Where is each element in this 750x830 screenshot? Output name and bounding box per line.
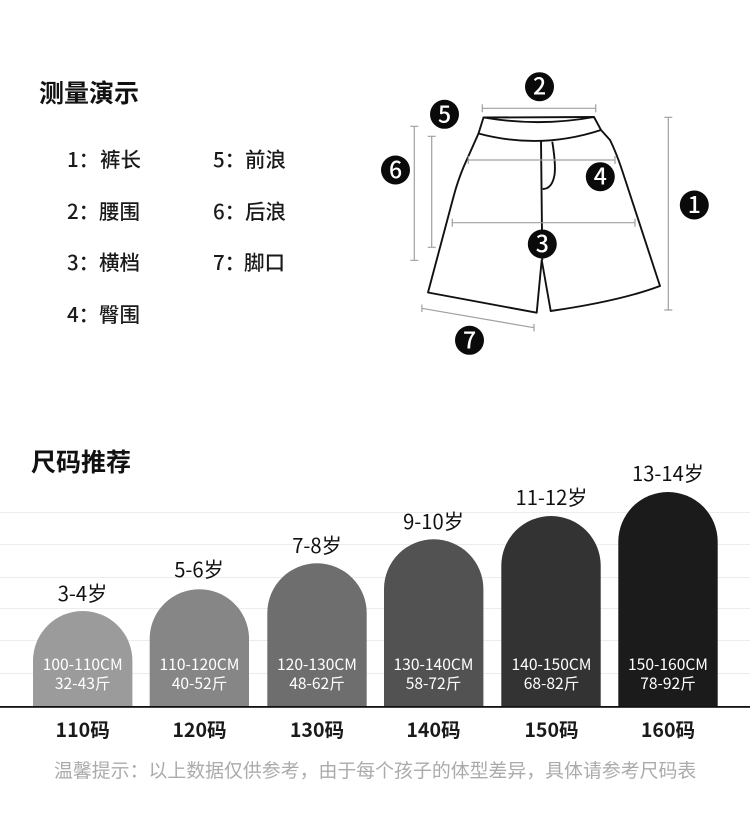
legend item 1: 1：: [67, 143, 99, 173]
legend: measurement list: [67, 143, 286, 328]
legend item 1: [67, 143, 141, 173]
bar chart: size by age: [33, 458, 718, 743]
dimension 6: back rise: [410, 126, 418, 260]
shorts diagram: [381, 68, 709, 355]
bar 120: 40-52斤: [172, 672, 227, 694]
legend item 3: 3：: [67, 246, 99, 276]
bar 140: 140码: [406, 714, 461, 743]
badge 3: [528, 225, 557, 259]
legend item 5: [213, 143, 286, 173]
dimension 7: leg opening: [422, 304, 534, 332]
heading: measurement demo: 测量演示: [39, 74, 139, 110]
badge 4: [586, 158, 615, 192]
badge 6: 6: [389, 151, 402, 185]
dimension 1: length: [664, 117, 672, 310]
shorts outline: [428, 117, 660, 313]
heading: size recommendation: 尺码推荐: [31, 443, 131, 479]
bar 140: 58-72斤: [406, 672, 461, 694]
legend item 7: [213, 246, 285, 276]
bar 120: 110-120CM: [160, 653, 239, 675]
bar 130: 48-62斤: [289, 672, 345, 694]
bar 150: 150码: [524, 714, 579, 743]
legend item 4: [67, 298, 140, 328]
dimension 3: crotch width: [452, 219, 635, 227]
bar 130: 130码: [290, 714, 344, 743]
bar 150: 68-82斤: [524, 672, 579, 694]
legend item 1: 裤长: [100, 143, 141, 173]
bar 150: 140-150CM: [512, 653, 591, 675]
bar 110: 32-43斤: [55, 672, 111, 694]
badge 1: [680, 186, 709, 220]
bar 110: [33, 578, 132, 743]
bar 130: [267, 530, 367, 743]
badge 4: 4: [594, 158, 607, 192]
badge 6: [381, 151, 410, 185]
badge 5: [430, 95, 459, 129]
legend item 2: 2：: [67, 195, 99, 225]
badge 5: 5: [438, 95, 451, 129]
legend item 2: 腰围: [99, 195, 140, 225]
bar 130: 120-130CM: [277, 653, 357, 675]
badge 1: 1: [688, 186, 701, 220]
bar 160: 13-14岁: [632, 458, 704, 487]
badge 2: [525, 68, 554, 102]
bar 120: [150, 554, 249, 743]
legend item 6: 后浪: [245, 195, 286, 225]
legend item 3: [67, 246, 140, 276]
badge 7: [455, 321, 484, 355]
legend item 5: 前浪: [245, 143, 286, 173]
badge 7: 7: [463, 321, 476, 355]
badge 2: 2: [533, 68, 546, 102]
bar 160: 160码: [641, 714, 695, 743]
bar 110: 100-110CM: [43, 653, 123, 675]
legend item 7: 7：: [213, 246, 245, 276]
bar 130: 7-8岁: [292, 530, 342, 559]
dimension 5: front rise: [428, 136, 436, 247]
legend item 7: 脚口: [244, 246, 285, 276]
bar 160: [618, 458, 718, 743]
legend item 2: [67, 195, 140, 225]
dimension 4: hip: [468, 156, 615, 164]
bar 160: 150-160CM: [628, 653, 708, 675]
bar 150: 11-12岁: [515, 482, 588, 511]
bar 120: 120码: [172, 714, 227, 743]
legend item 5: 5：: [213, 143, 245, 173]
bar 140: 9-10岁: [403, 506, 464, 535]
bar 150: [501, 482, 601, 743]
legend item 6: 6：: [213, 195, 245, 225]
bar 160: 78-92斤: [640, 672, 696, 694]
bar 140: [384, 506, 483, 743]
legend item 4: 臀围: [99, 298, 140, 328]
footnote: 温馨提示：以上数据仅供参考，由于每个孩子的体型差异，具体请参考尺码表: [54, 756, 696, 783]
bar 110: 3-4岁: [58, 578, 107, 607]
legend item 4: 4：: [67, 298, 99, 328]
bar 140: 130-140CM: [394, 653, 473, 675]
bar 120: 5-6岁: [174, 554, 224, 583]
legend item 3: 横档: [99, 246, 140, 276]
dimension 2: waist: [482, 104, 596, 112]
bar 110: 110码: [56, 714, 110, 743]
legend item 6: [213, 195, 286, 225]
badge 3: 3: [536, 225, 549, 259]
